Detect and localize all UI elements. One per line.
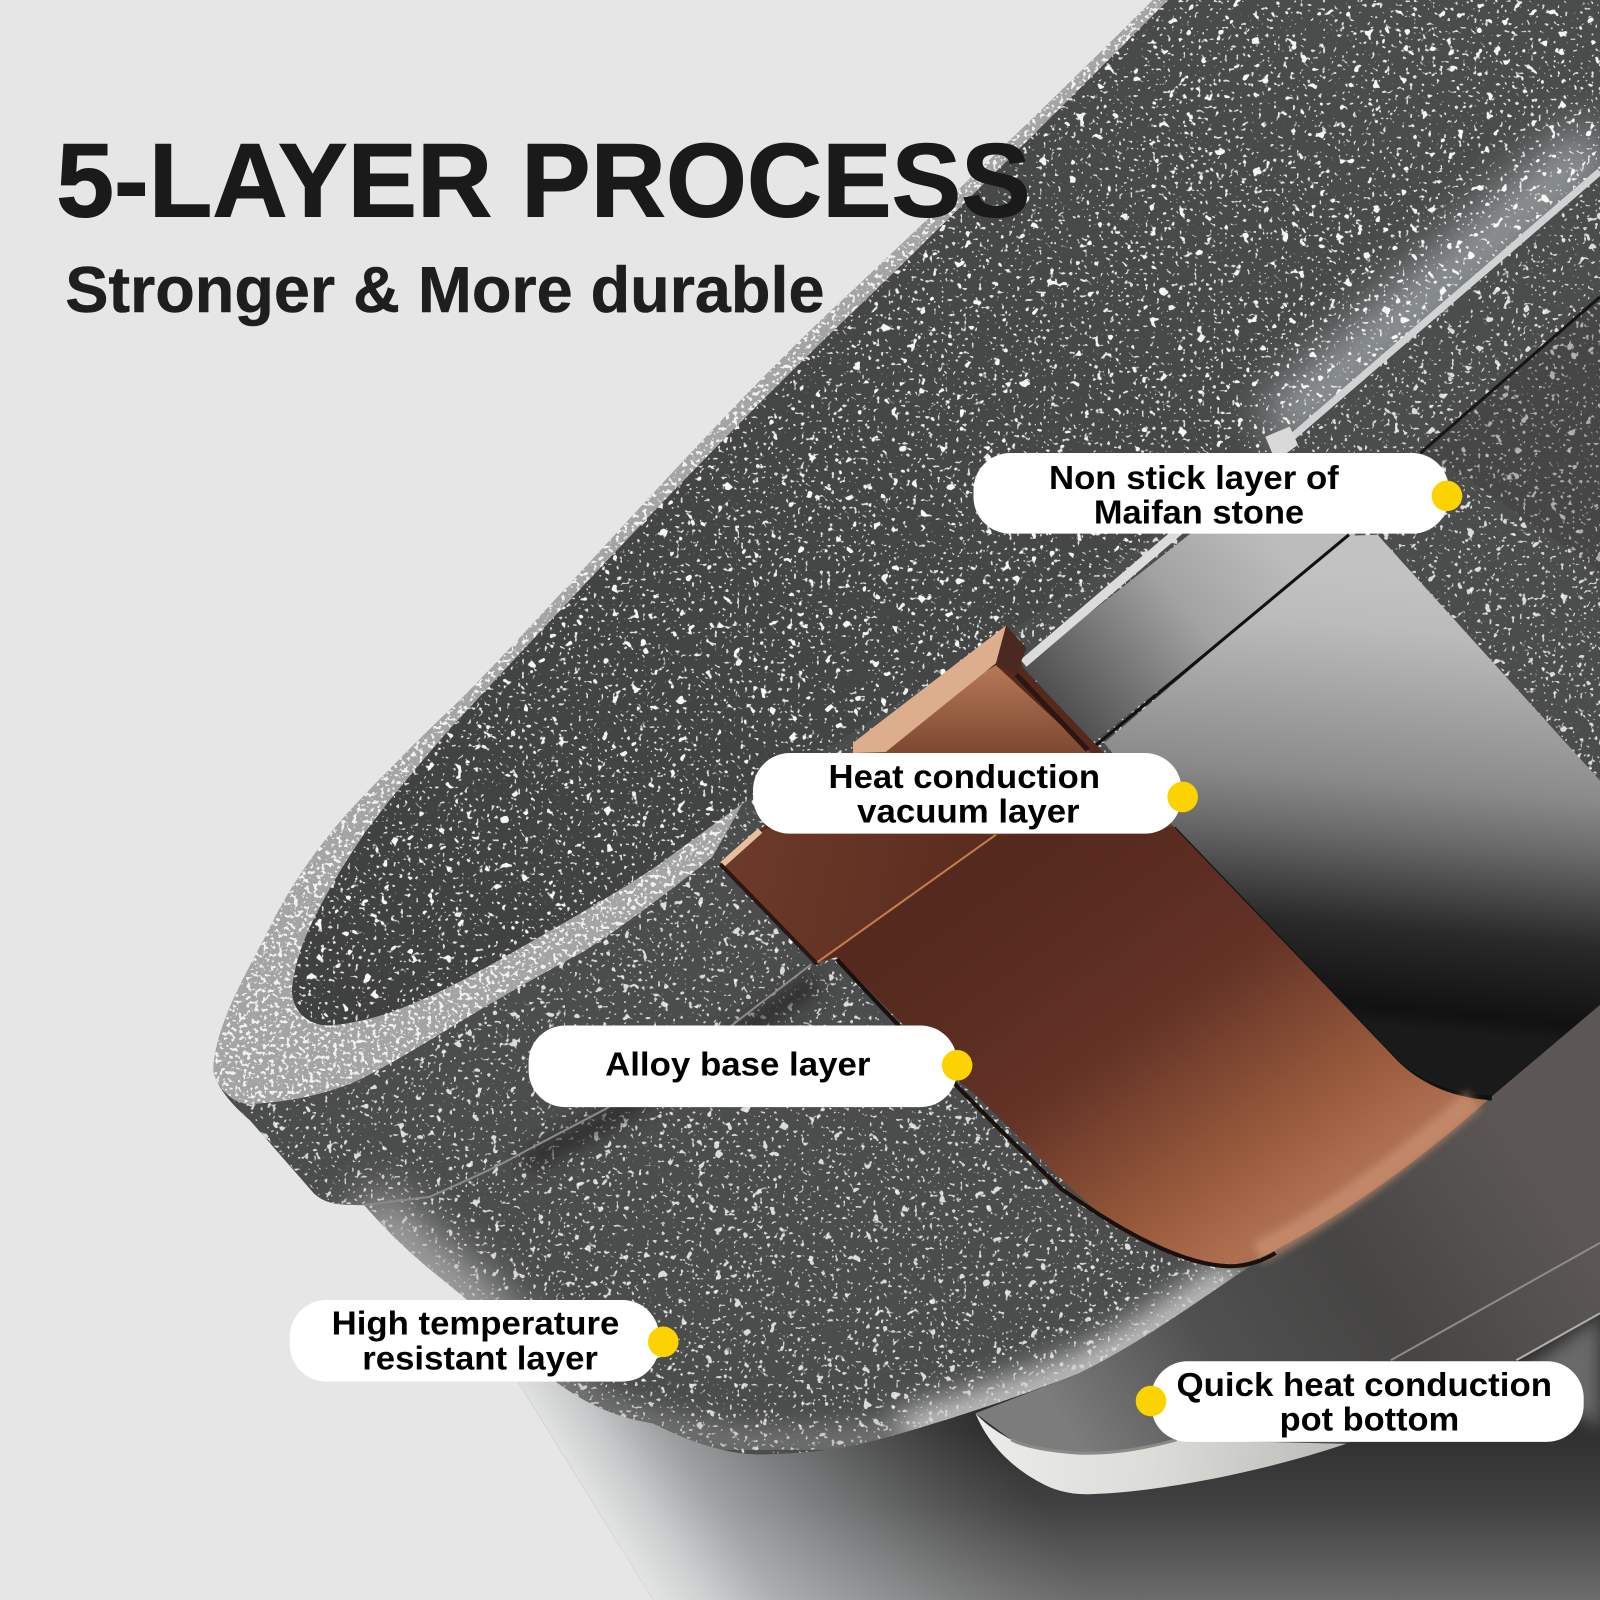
callout: quick heat conduction pot bottom: pot bottom (1280, 1402, 1459, 1439)
callout: high temperature resistant layer (290, 1300, 679, 1382)
wall groove, right side (1420, 297, 1600, 571)
pan outer wall with speckle (213, 0, 1600, 1454)
callout: non stick layer: Non stick layer of (1049, 460, 1340, 497)
exposed layer: silver upper strip (1023, 474, 1357, 745)
pan interior: dark speckled non-stick surface (292, 0, 1600, 1026)
copper end block: top face (776, 665, 1173, 835)
callout: heat conduction vacuum layer: Heat conduction (829, 759, 1100, 796)
callout: non stick layer (973, 453, 1462, 534)
callout: alloy base layer (529, 1026, 972, 1107)
callout: non stick layer: Maifan stone (1094, 494, 1304, 531)
callout: high temperature resistant layer: resistant layer (362, 1340, 598, 1377)
pot bottom: dark metal base (976, 1005, 1600, 1453)
pot bottom: light base ring (976, 1413, 1346, 1494)
callout: high temperature resistant layer: High temperature (332, 1306, 619, 1343)
copper end block: front face (722, 829, 996, 962)
title: 5-LAYER PROCESS (56, 122, 1031, 239)
exposed layer: silver main face (1104, 535, 1600, 1100)
callout: heat conduction vacuum layer (753, 753, 1198, 834)
callout: quick heat conduction pot bottom: Quick heat conduction (1177, 1367, 1552, 1404)
copper highlights (720, 626, 1473, 1266)
far rim highlight stripe (1265, 171, 1600, 461)
callout: heat conduction vacuum layer: vacuum layer (857, 793, 1080, 830)
callout: alloy base layer: Alloy base layer (605, 1047, 870, 1084)
silver highlight edge and divider (1023, 457, 1492, 1098)
floor shadow beneath the pan (510, 1224, 1600, 1600)
pan rim underside and step line (364, 964, 816, 1205)
pan rim: light speckled face (214, 0, 1168, 1104)
exposed layer: copper main face (720, 626, 1488, 1264)
subtitle: Stronger & More durable (65, 253, 824, 326)
callout: quick heat conduction pot bottom (1136, 1361, 1584, 1442)
